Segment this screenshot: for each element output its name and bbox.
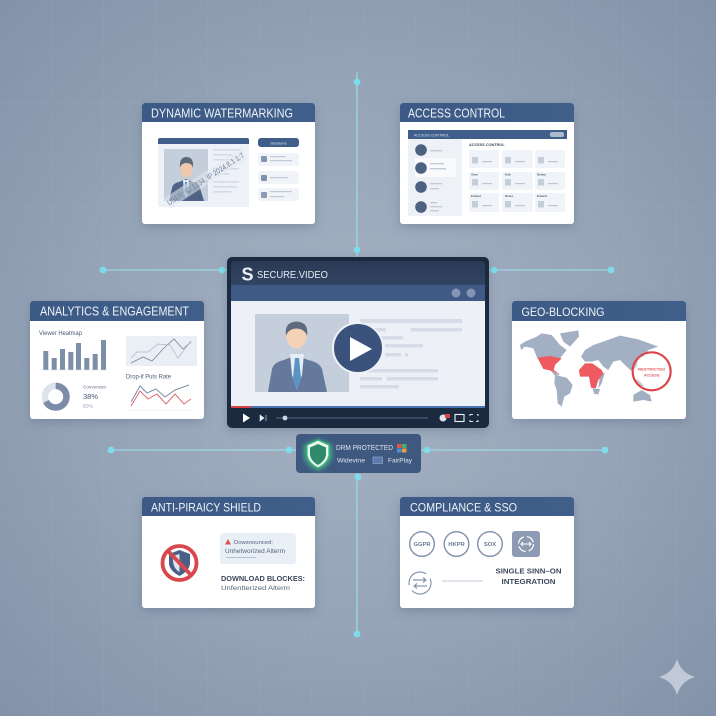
sso label: INTEGRATION — [502, 577, 556, 586]
heading: compliance: COMPLIANCE & SSO — [410, 503, 517, 515]
connector nodes — [100, 79, 614, 637]
inner title bar: ACCESS CONTROL — [414, 134, 449, 138]
heading: compliance — [400, 497, 574, 516]
alert box: Unhetworized Alterm — [225, 548, 285, 555]
donut chart: 80% — [83, 404, 94, 410]
connector line — [442, 580, 483, 582]
drm protected badge: Widevine — [337, 458, 365, 464]
user list — [408, 139, 462, 216]
badge labels: HKPR — [448, 542, 466, 548]
logo: SECURE.VIDEO — [257, 269, 328, 281]
progress bar — [231, 406, 485, 408]
panel: anti-piracy shield — [142, 497, 315, 608]
drm protected badge: FairPlay — [388, 458, 413, 464]
icon: sso tile — [512, 531, 540, 557]
heading: anti-piracy: ANTI-PIRAICY SHIELD — [151, 503, 261, 515]
icon: sync arrows — [409, 572, 431, 594]
line chart: trend — [126, 336, 197, 366]
bar chart: viewer heatmap: Viewer Heatmap — [39, 331, 83, 337]
blocked message: Unfentterized Alterm — [221, 585, 290, 592]
world map — [520, 330, 671, 407]
sidebar list: Sessions — [270, 140, 287, 146]
restricted regions — [537, 356, 603, 388]
sso label — [496, 566, 562, 586]
line chart: drop-off rate: Drop-if Puts Rate — [126, 374, 171, 380]
sidebar list — [258, 138, 299, 201]
icon: colored squares — [397, 444, 406, 452]
donut chart: Conversion — [83, 384, 107, 390]
document with watermark: USER: ID 1234, IP 2024.8.1 1:7 — [165, 151, 246, 207]
donut chart — [45, 384, 107, 410]
permission grid: Extend — [537, 194, 547, 198]
panel: access control — [400, 103, 574, 224]
panel: geo-blocking — [512, 301, 686, 419]
panel: dynamic watermarking — [142, 103, 315, 224]
restricted access stamp — [633, 352, 671, 390]
bar chart: viewer heatmap — [39, 331, 108, 370]
panel: compliance and sso — [400, 497, 574, 608]
compliance badges — [410, 532, 502, 556]
logo: S — [241, 264, 254, 284]
badge labels: SOX — [484, 542, 496, 548]
permission grid: Edit — [505, 172, 511, 176]
heading: dynamic watermarking — [142, 103, 315, 122]
heading: anti-piracy — [142, 497, 315, 516]
line chart: drop-off rate — [126, 374, 192, 410]
heading: geo-blocking: GEO-BLOCKING — [522, 305, 604, 319]
restricted access stamp: RESTRICTED — [638, 367, 665, 372]
icon: blocked shield — [162, 546, 196, 580]
heading: geo-blocking — [512, 301, 686, 321]
sso label: SINGLE SINN–ON — [496, 566, 562, 576]
blocked message: DOWNLOAD BLOCKES: — [221, 574, 305, 583]
heading: dynamic watermarking: DYNAMIC WATERMARKING — [151, 106, 293, 120]
restricted access stamp: ACCESS — [644, 374, 660, 378]
permission grid: Embed — [471, 194, 481, 198]
blocked message — [221, 574, 305, 592]
player header — [231, 261, 485, 301]
permission grid: Notes — [505, 194, 514, 198]
permission grid: Delete — [537, 172, 546, 176]
donut chart: 38% — [83, 392, 98, 401]
heading: analytics: ANALYTICS & ENGAGEMENT — [40, 305, 189, 319]
icon: sparkle — [659, 659, 695, 695]
drm protected badge: DRM PROTECTED — [336, 443, 393, 452]
alert box — [220, 533, 296, 564]
icon: green shield — [304, 439, 332, 471]
video content — [231, 301, 485, 407]
badge labels — [413, 542, 496, 548]
heading: access control: ACCESS CONTROL — [408, 106, 505, 120]
alert box: Dowsnounced: — [234, 540, 273, 546]
player controls — [243, 414, 478, 422]
badge labels: GGPR — [413, 542, 431, 548]
permission grid — [469, 143, 565, 212]
icon: play button — [333, 323, 383, 373]
drm protected badge — [296, 434, 421, 473]
heading: access control — [400, 103, 574, 122]
main video player — [227, 257, 489, 428]
connector lines — [103, 72, 611, 634]
logo — [241, 264, 328, 284]
inner title bar — [408, 130, 567, 139]
heading: analytics — [30, 301, 204, 321]
permission grid: ACCESS CONTROL — [469, 143, 505, 147]
panel: analytics and engagement — [30, 301, 204, 419]
permission grid: View — [471, 172, 478, 176]
